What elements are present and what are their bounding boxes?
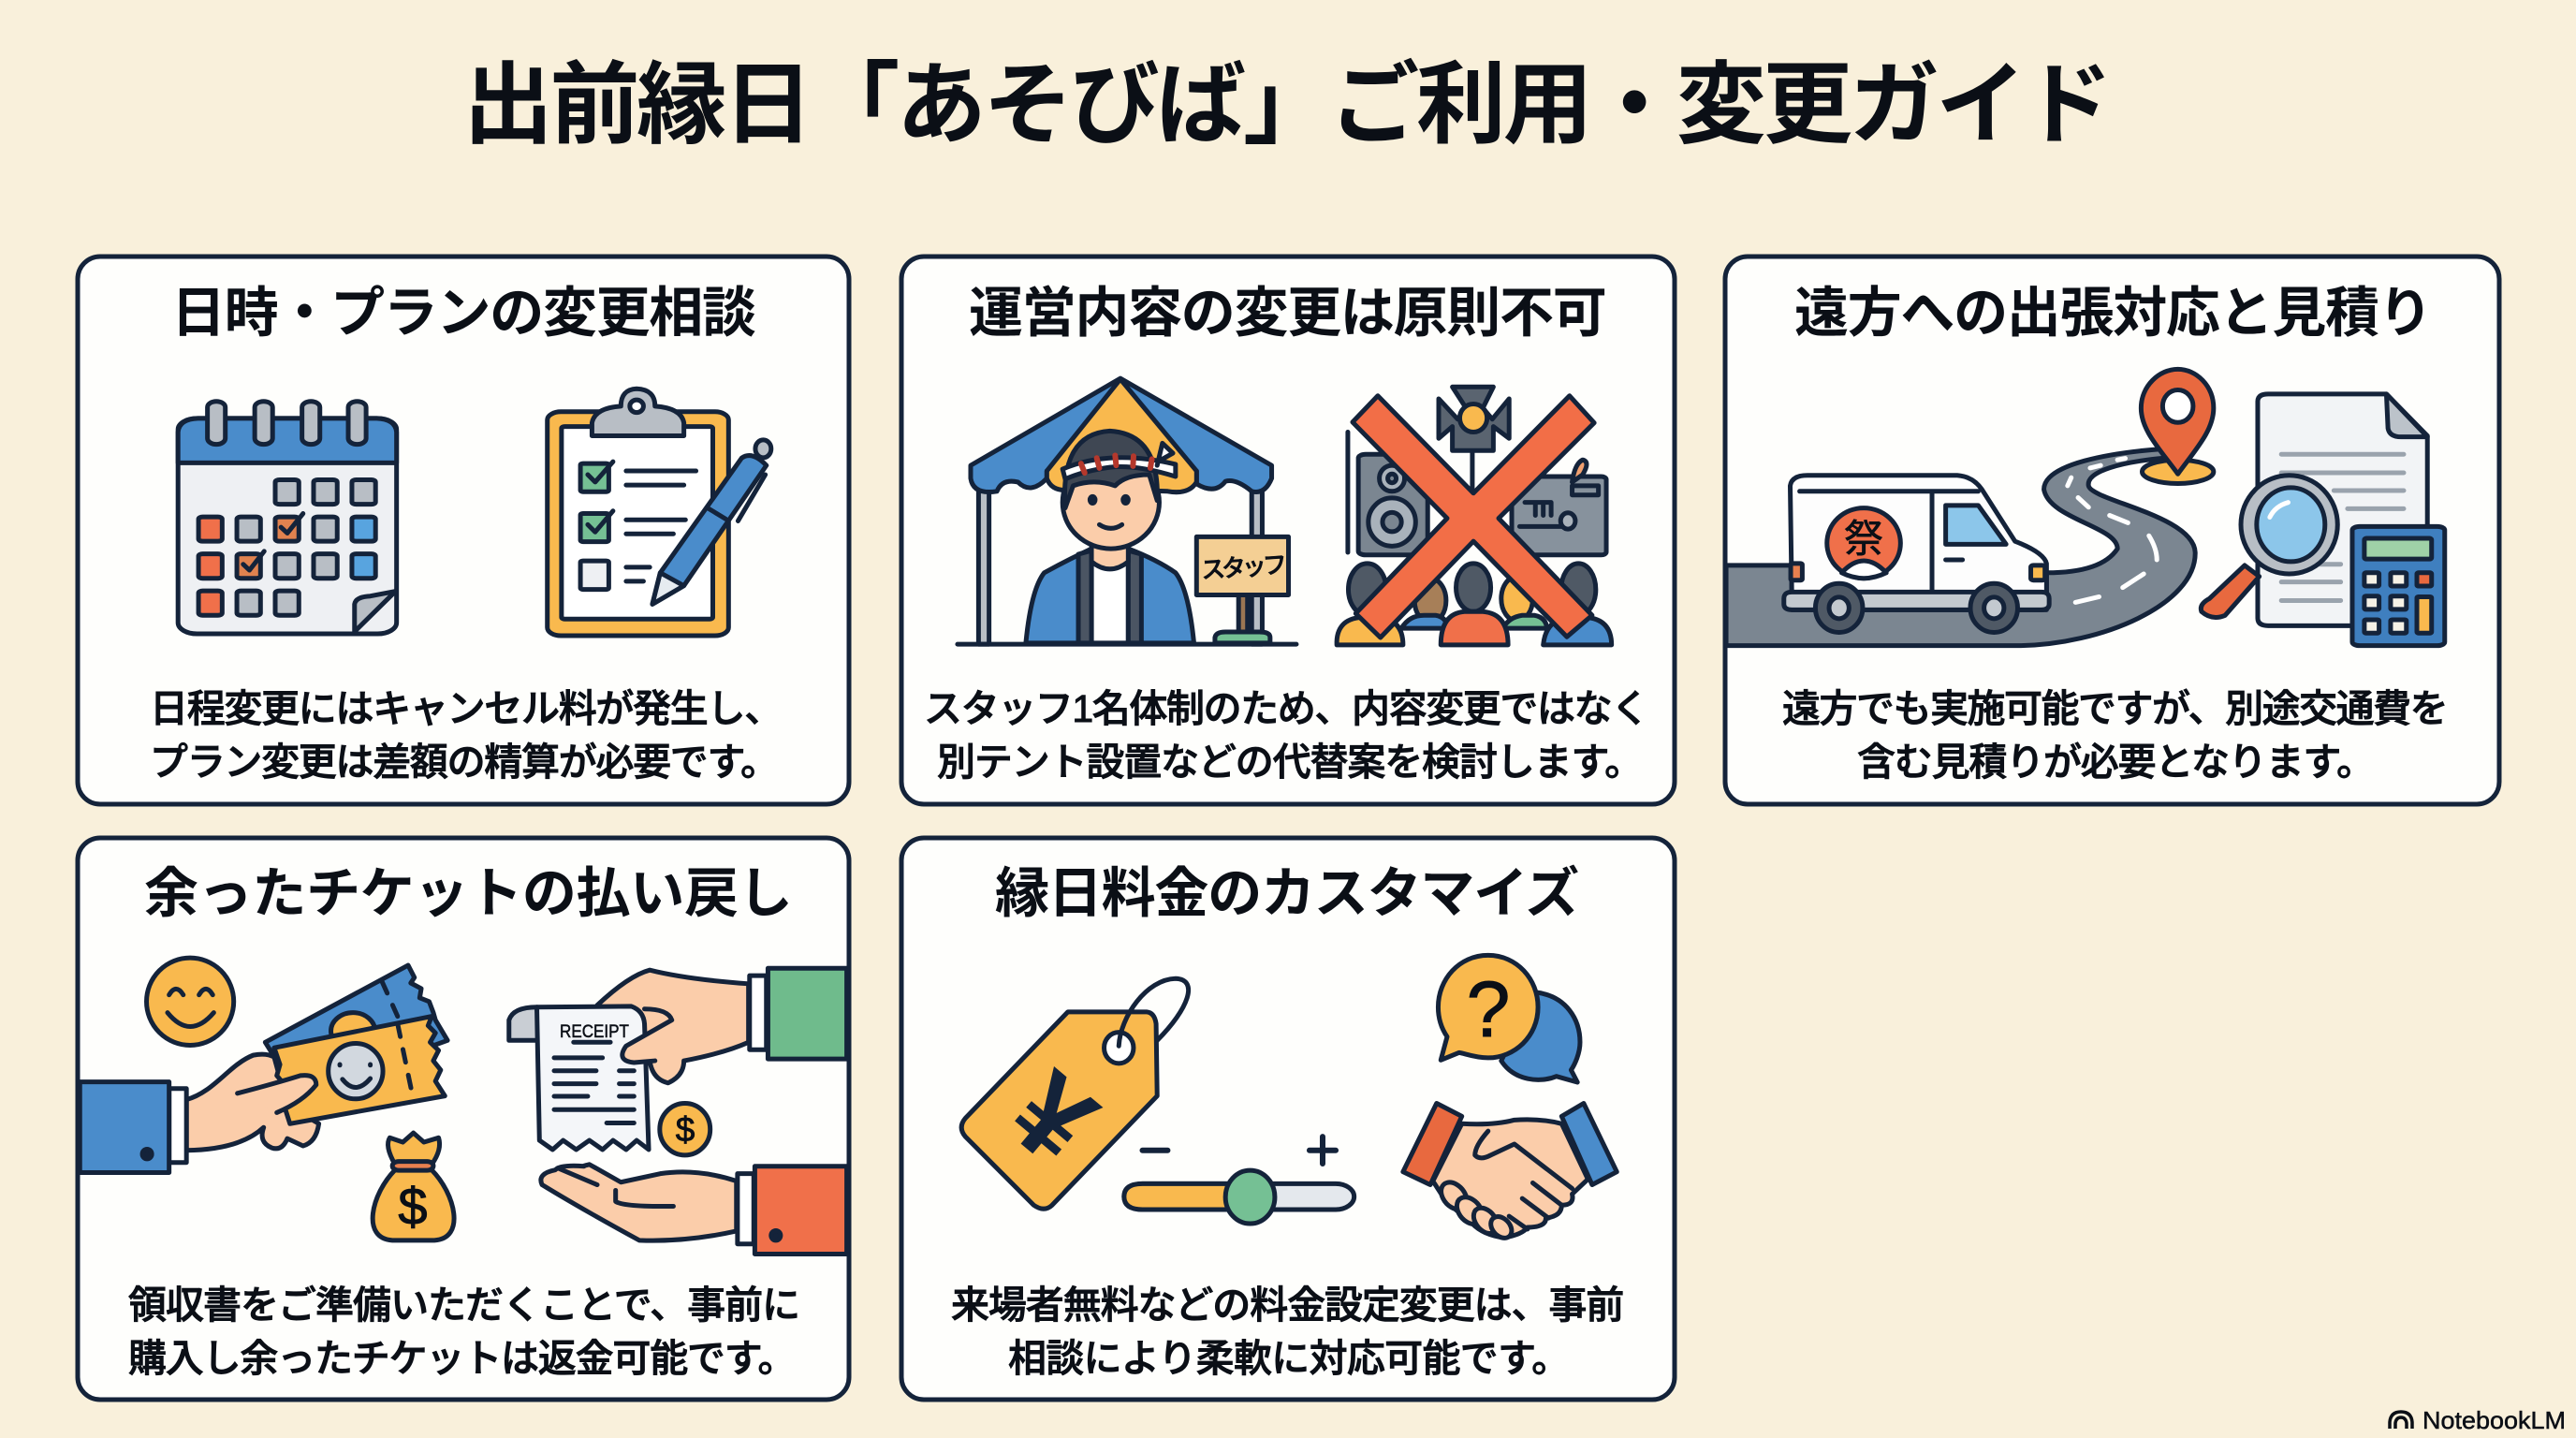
card background	[78, 838, 849, 1400]
question mark: ?	[1467, 965, 1510, 1053]
icon: handshake	[1403, 1104, 1617, 1240]
title: 出前縁日「あそびば」ご利用・変更ガイド	[463, 55, 2109, 155]
icon: receiving hand	[541, 1165, 847, 1254]
heading: 縁日料金のカスタマイズ	[995, 863, 1578, 924]
panel: remote trips and estimates	[1725, 257, 2499, 804]
icon: speech bubbles	[1438, 955, 1580, 1082]
panel: fee customization	[901, 838, 1675, 1400]
card background	[901, 257, 1675, 804]
icon: price slider	[1124, 1137, 1354, 1224]
icon: hand offering tickets	[80, 965, 447, 1172]
body text: 購入し余ったチケットは返金可能です。	[128, 1337, 795, 1380]
body text: 日程変更にはキャンセル料が発生し、	[150, 687, 782, 730]
icon: road and van	[1726, 448, 2195, 646]
logo text: NotebookLM	[2422, 1406, 2566, 1434]
icon: money bag	[373, 1133, 454, 1240]
panel: schedule and plan changes	[78, 257, 849, 804]
card background	[78, 257, 849, 804]
icon: calendar	[178, 402, 397, 634]
body text: 来場者無料などの料金設定変更は、事前	[951, 1284, 1623, 1327]
NotebookLM logo	[2390, 1406, 2566, 1434]
body text: 含む見積りが必要となります。	[1857, 741, 2374, 784]
body text: 相談により柔軟に対応可能です。	[1008, 1337, 1570, 1380]
icon: location pin	[2141, 369, 2214, 483]
icon: tent with staff	[958, 378, 1296, 644]
body text: プラン変更は差額の精算が必要です。	[150, 741, 778, 784]
panel: operation changes not allowed	[901, 257, 1675, 804]
body text	[924, 687, 1648, 784]
icon: hand with receipt	[509, 968, 847, 1155]
van emblem: 祭	[1844, 517, 1883, 561]
body text: 領収書をご準備いただくことで、事前に	[128, 1284, 799, 1327]
logo icon	[2390, 1412, 2412, 1429]
icon: clipboard and pen	[548, 389, 771, 636]
panel: ticket refunds	[78, 838, 849, 1400]
icon: smiley	[147, 958, 234, 1045]
body text: スタッフ1名体制のため、内容変更ではなく	[924, 687, 1648, 730]
card background	[901, 838, 1675, 1400]
heading: 余ったチケットの払い戻し	[144, 863, 792, 924]
sign label: スタッフ	[1200, 550, 1285, 584]
yen sign on tag: ¥	[986, 1048, 1120, 1189]
icon: crossed out stage equipment and audience	[1337, 387, 1612, 645]
body text	[150, 687, 782, 784]
card background	[1725, 257, 2499, 804]
money bag dollar sign: $	[398, 1177, 428, 1236]
coin dollar sign: $	[676, 1110, 695, 1149]
body text	[128, 1284, 799, 1380]
body text: 別テント設置などの代替案を検討します。	[937, 741, 1642, 784]
receipt label: RECEIPT	[560, 1022, 629, 1042]
body text	[951, 1284, 1623, 1380]
body text: 遠方でも実施可能ですが、別途交通費を	[1782, 687, 2447, 730]
heading: 遠方への出張対応と見積り	[1794, 283, 2431, 344]
heading: 日時・プランの変更相談	[171, 283, 755, 344]
icon: estimate document, magnifier and calculator	[2201, 394, 2445, 646]
body text	[1782, 687, 2447, 784]
heading: 運営内容の変更は原則不可	[969, 283, 1605, 344]
icon: price tag	[961, 978, 1189, 1209]
